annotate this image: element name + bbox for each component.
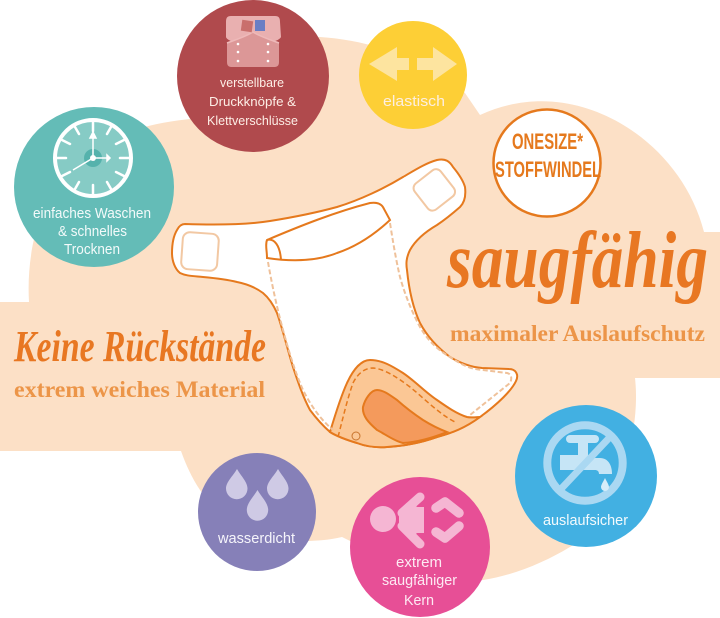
snap button [352,432,360,440]
subheading: maximaler Auslaufschutz: maximaler Auslaufschutz [450,321,705,346]
illustration: diaper [172,159,517,447]
subheading: extrem weiches Material: extrem weiches Material [14,377,265,402]
label: Kern [404,593,434,609]
label: Trocknen [64,241,120,258]
badge: onesize: STOFFWINDEL [495,157,601,182]
pocket flap [266,203,390,260]
icon: absorption [370,497,459,544]
label: einfaches Waschen [33,205,151,222]
diaper outline [172,159,517,447]
label: verstellbare [220,75,284,90]
icon: drops [226,469,288,521]
icon: crossed tap [547,425,623,501]
badge: onesize [494,110,601,216]
label: auslaufsicher [543,513,628,529]
icon: arrows [369,47,457,81]
label: elastisch [383,93,445,110]
core panel [330,360,480,447]
label: saugfähiger [382,573,457,589]
absorbent pad [363,390,447,443]
badge: einfaches Waschen [14,107,174,267]
label [33,205,151,258]
label: Druckknöpfe & [209,94,296,109]
icon: clock [55,120,131,196]
badge: extrem saugfähiger Kern [350,477,490,617]
stitching [338,368,457,437]
badge: auslaufsicher [515,405,657,547]
badge: verstellbare Druckknöpfe [177,0,329,152]
label [382,555,457,609]
badge: wasserdicht [198,453,316,571]
icon: mini diaper [226,16,281,67]
heading: Keine Rückstände: Keine Rückstände [13,322,266,371]
badge: onesize: ONESIZE* [512,129,583,154]
badge: elastisch [359,21,467,129]
label [207,75,298,128]
label: Klettverschlüsse [207,113,298,128]
velcro tabs [181,232,219,271]
label: extrem [396,555,442,571]
label: wasserdicht [217,531,295,547]
label: & schnelles [58,223,127,240]
